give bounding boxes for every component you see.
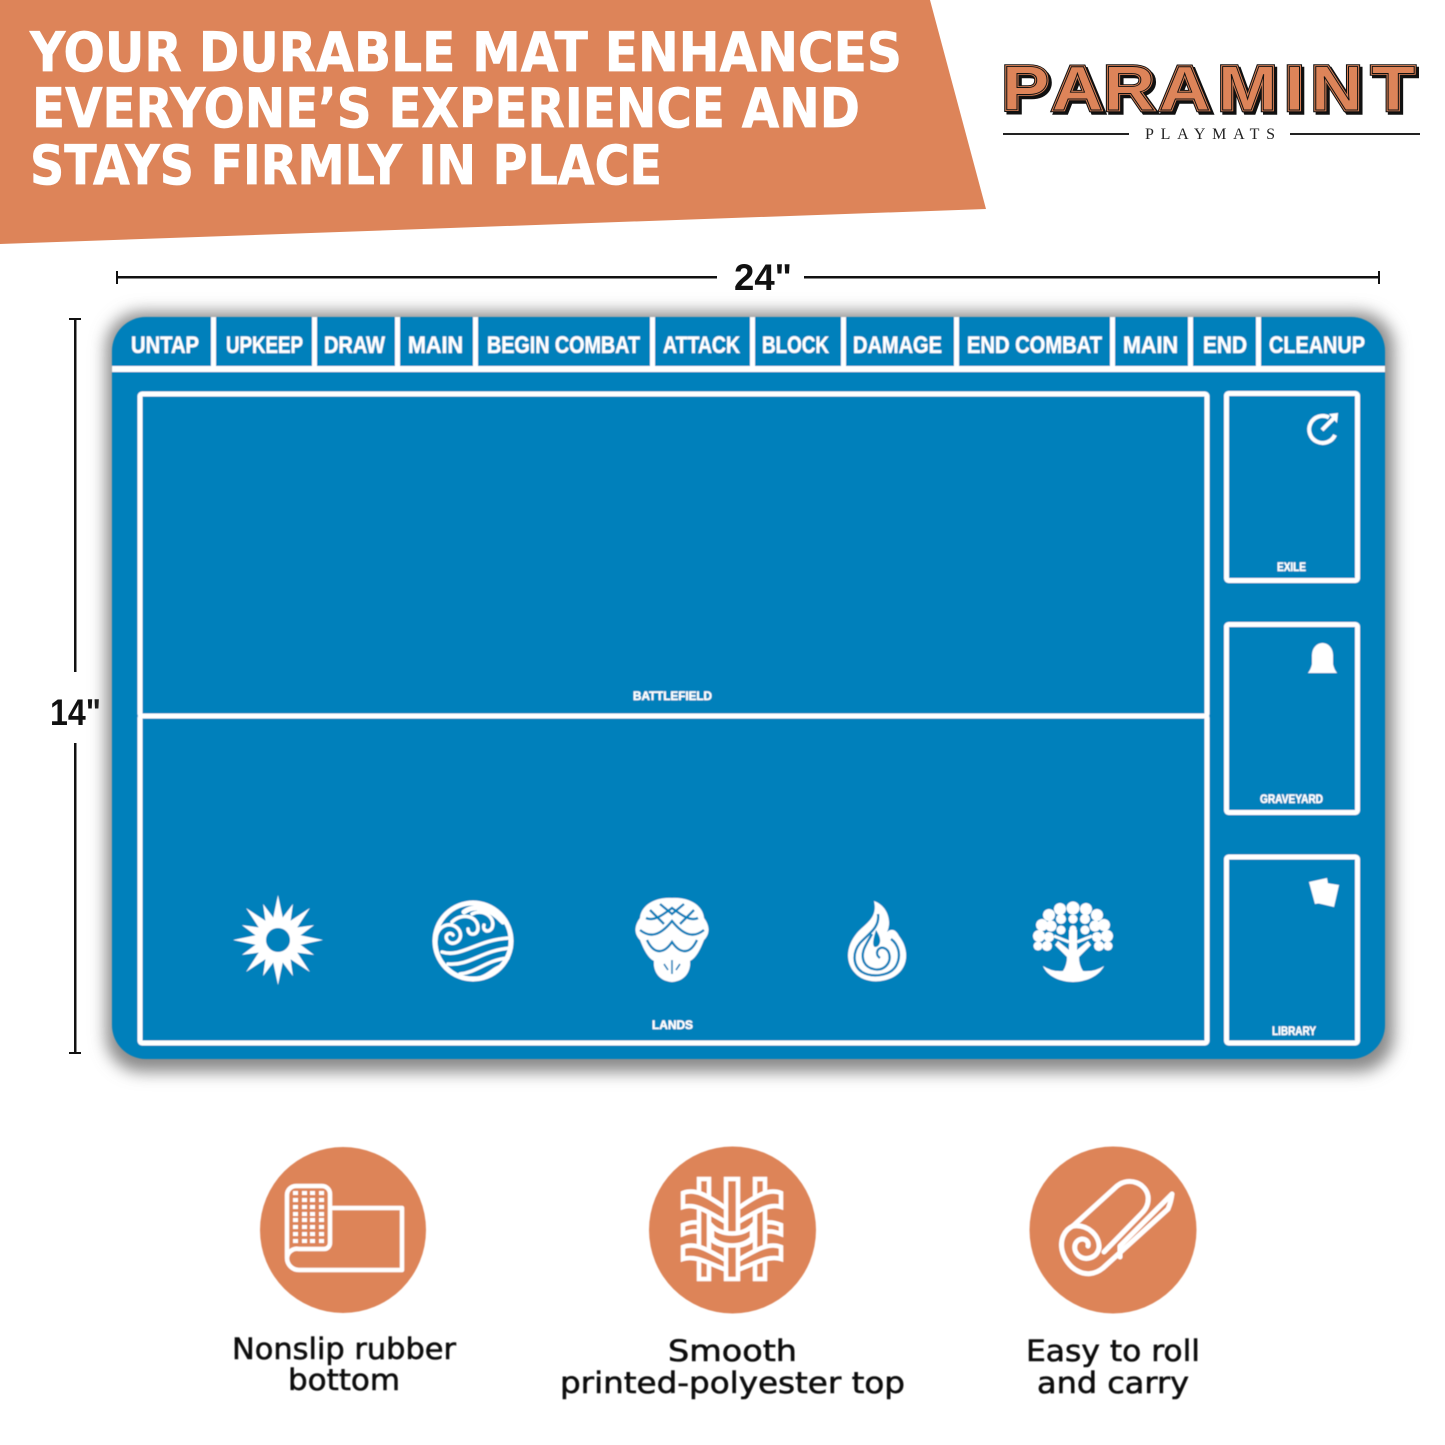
caption [1026, 1334, 1200, 1400]
library zone: LIBRARY [1272, 1024, 1316, 1038]
phase bar: END COMBAT [967, 332, 1102, 359]
phase bar: UPKEEP [226, 332, 303, 359]
banner title: YOUR DURABLE MAT ENHANCES [29, 21, 902, 84]
graveyard zone [1226, 624, 1358, 812]
icon: tree [1033, 902, 1113, 982]
phase bar: BEGIN COMBAT [487, 332, 640, 359]
icon: skull [636, 898, 708, 982]
icon: water [435, 903, 511, 979]
icon: sun [233, 895, 323, 985]
playmat [112, 317, 1385, 1400]
graveyard zone: GRAVEYARD [1260, 792, 1323, 806]
phase bar: CLEANUP [1269, 332, 1365, 359]
icon: cards [1309, 878, 1339, 907]
library zone [1226, 857, 1358, 1043]
caption [560, 1334, 905, 1400]
phase bar: ATTACK [663, 332, 741, 359]
phase bar: BLOCK [762, 332, 830, 359]
banner title: STAYS FIRMLY IN PLACE [30, 134, 662, 197]
icon: mat with rubber back [287, 1186, 402, 1270]
logo: Paramint Playmats: PARAMINT [1002, 54, 1415, 124]
feature: easy to roll and carry [1026, 1146, 1200, 1400]
exile zone: EXILE [1277, 560, 1306, 574]
logo: Paramint Playmats: PARAMINT [1002, 54, 1415, 124]
phase bar: END [1203, 332, 1247, 359]
height dimension: 14 inches: 14" [50, 692, 101, 733]
caption [232, 1332, 456, 1397]
banner title [29, 21, 902, 197]
icon: rolled mat [1061, 1181, 1172, 1274]
logo: Paramint Playmats: PARAMINT [1002, 54, 1415, 124]
width dimension: 24 inches: 24" [734, 257, 792, 298]
lands zone [140, 716, 1207, 1043]
phase bar: MAIN [408, 332, 463, 359]
battlefield zone [140, 394, 1207, 716]
caption: Nonslip rubber [232, 1332, 456, 1366]
caption: Easy to roll [1026, 1334, 1200, 1368]
phase bar: UNTAP [131, 332, 199, 359]
caption: Smooth [668, 1334, 797, 1368]
icon: woven fabric [683, 1179, 781, 1279]
feature: nonslip rubber bottom [232, 1147, 456, 1397]
phase bar: MAIN [1123, 332, 1178, 359]
icon: fire [848, 901, 906, 981]
exile zone [1226, 394, 1358, 580]
header banner [0, 0, 986, 244]
caption: and carry [1037, 1366, 1189, 1400]
logo: Paramint Playmats: PLAYMATS [1145, 126, 1275, 143]
banner title: EVERYONE’S EXPERIENCE AND [32, 77, 860, 140]
battlefield zone: BATTLEFIELD [633, 689, 712, 703]
feature: smooth polyester top [560, 1146, 905, 1400]
mat shadow [106, 312, 1394, 1072]
icon: exile arrow [1309, 413, 1338, 443]
icon: tombstone [1308, 643, 1337, 673]
caption: bottom [288, 1363, 400, 1397]
phase bar [112, 317, 1385, 372]
phase bar: DAMAGE [853, 332, 942, 359]
logo: Paramint Playmats: PARAMINT [1004, 56, 1417, 127]
lands zone: LANDS [652, 1018, 693, 1032]
phase bar: DRAW [324, 332, 385, 359]
caption: printed-polyester top [560, 1366, 905, 1400]
